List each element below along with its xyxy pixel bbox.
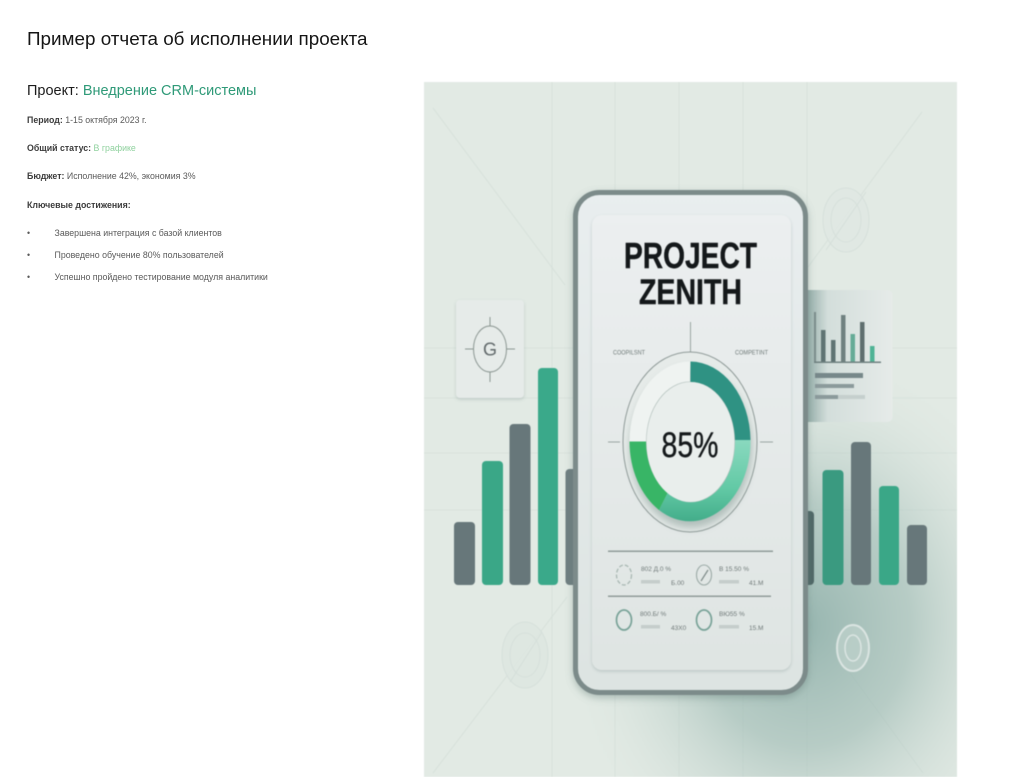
stat item 1: 802 Д.0 %: [641, 566, 671, 573]
icon card: G target: [456, 300, 524, 398]
ring shadow: [630, 368, 752, 528]
period: Период: 1-15 октября 2023 г.: [27, 115, 147, 125]
gauge labels and ticks: [608, 322, 773, 442]
achievement 3: Успешно пройдено тестирование модуля аналитики: [54, 272, 268, 282]
gauge labels and ticks: COMPETINT: [735, 350, 768, 356]
phone heading: ZENITH: [639, 273, 742, 312]
stat item 4: 15.М: [749, 625, 763, 632]
phone heading: [624, 235, 757, 312]
stat item 4: ВЮ55 %: [719, 611, 745, 618]
bar chart: left: [454, 368, 580, 585]
glass disc: bottom left: [502, 622, 548, 688]
stat item 2: [696, 565, 763, 587]
stat item 2: В 15.50 %: [719, 566, 749, 573]
teal segment: [690, 362, 750, 440]
stat item 3: [616, 610, 687, 632]
green segment: [630, 442, 668, 510]
budget: Бюджет: Исполнение 42%, экономия 3%: [27, 171, 196, 181]
stat item 1: [616, 565, 685, 587]
gauge labels and ticks: COOPILSNT: [613, 350, 645, 356]
remaining segment: [630, 362, 690, 442]
achievement 2: •: [27, 250, 30, 260]
achievement 1: Завершена интеграция с базой клиентов: [54, 228, 222, 238]
mini lines: [815, 373, 865, 399]
stat item 4: [696, 610, 763, 632]
title: Пример отчета об исполнении проекта: [27, 28, 368, 49]
achievement 2: Проведено обучение 80% пользователей: [54, 250, 224, 260]
mint segment: [659, 440, 751, 521]
stat item 3: 800.Б/ %: [640, 611, 667, 618]
mini bars: [814, 312, 881, 363]
background shadow: [424, 82, 957, 777]
gauge centre: [646, 382, 734, 502]
bar chart: right: [800, 442, 927, 585]
achievement 1: •: [27, 228, 30, 238]
stat item 3: 43Х0: [671, 625, 687, 632]
donut gauge: 85%: [623, 352, 757, 532]
gauge value: 85%: [662, 426, 718, 465]
phone heading: PROJECT: [624, 235, 757, 276]
inner card: [592, 215, 791, 670]
overall status: Общий статус: В графике: [27, 143, 136, 153]
project heading: Проект: Внедрение CRM-системы: [27, 82, 256, 98]
text block: project report: [27, 82, 268, 282]
glass disc: bottom right: [837, 625, 869, 671]
stats dividers: [608, 550, 773, 597]
icon card: G target: G: [483, 340, 497, 360]
background grid: [424, 82, 957, 777]
achievement 3: •: [27, 272, 30, 282]
stat item 2: 41.М: [749, 580, 763, 587]
glass disc: top right: [823, 188, 869, 252]
achievements heading: Ключевые достижения:: [27, 200, 131, 210]
background panel: [424, 82, 957, 777]
phone body: [576, 192, 806, 692]
stat item 1: Б.00: [671, 580, 685, 587]
mini chart card: [800, 290, 892, 422]
